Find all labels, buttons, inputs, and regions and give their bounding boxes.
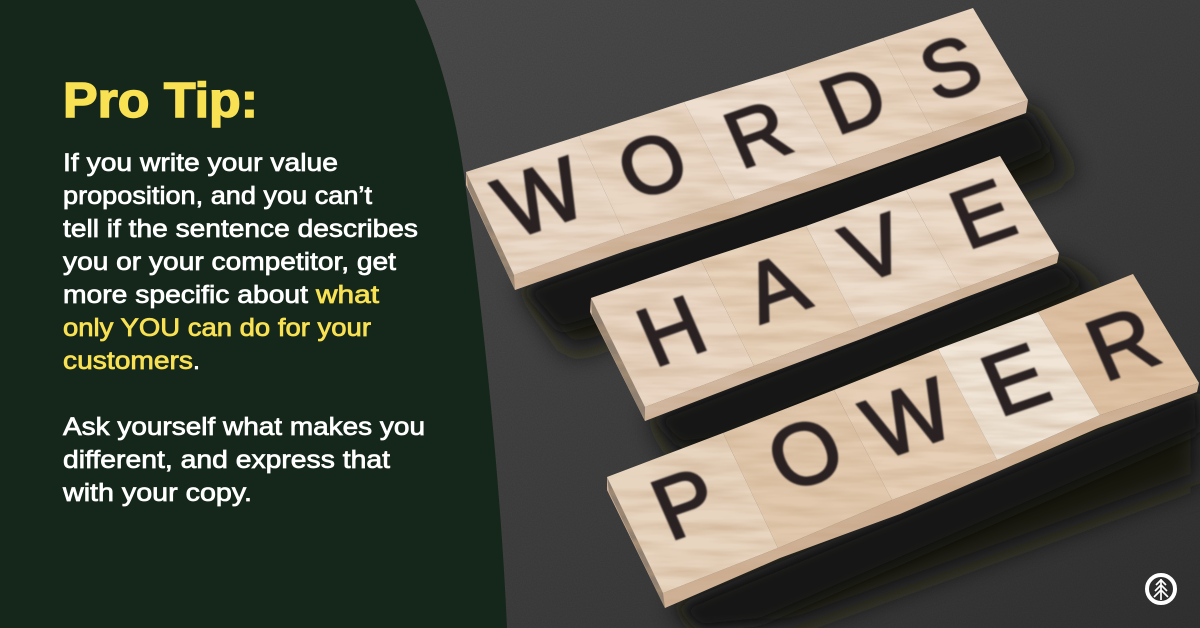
letters: HAVE — [624, 162, 1028, 384]
letters: POWER: O — [753, 397, 857, 510]
letters: WORDS: D — [808, 49, 900, 152]
text block: second paragraph: Ask yourself what makes you — [63, 413, 425, 441]
icon: tree logo badge — [1147, 575, 1175, 603]
tile sides: HAVE — [590, 253, 1059, 421]
text block: second paragraph — [62, 413, 425, 507]
letters: HAVE: H — [624, 278, 719, 384]
letters: POWER — [638, 288, 1172, 559]
text block: second paragraph: with your copy. — [62, 479, 252, 507]
tile sides: WORDS — [466, 100, 1028, 290]
letters: WORDS: R — [712, 83, 804, 186]
tile left edge: WORDS — [466, 172, 515, 290]
text block: first paragraph: only YOU can do for your — [63, 314, 371, 342]
letters: WORDS: O — [605, 113, 701, 218]
letters: HAVE: A — [730, 236, 821, 340]
tile H — [591, 260, 754, 407]
tile E — [938, 312, 1100, 460]
text block: first paragraph: proposition, and you can’t — [63, 182, 372, 210]
letters: POWER: E — [968, 325, 1063, 435]
letters: WORDS: S — [907, 18, 994, 119]
text block: first paragraph: . — [193, 347, 200, 375]
tile R — [684, 71, 837, 200]
tile shadows — [520, 105, 1200, 628]
letters: WORDS — [481, 18, 994, 257]
letters: WORDS: W — [481, 138, 600, 257]
text block: first paragraph: what — [315, 281, 379, 309]
tile W — [834, 349, 997, 500]
tile V — [806, 190, 961, 327]
tile D — [785, 38, 933, 165]
tile left edge: POWER — [607, 477, 665, 608]
letters: POWER: R — [1072, 288, 1172, 399]
tile left edge: HAVE — [591, 298, 645, 421]
text block: first paragraph: customers — [63, 347, 193, 375]
tile S — [883, 8, 1028, 132]
background photo: dark textured surface — [400, 0, 1200, 628]
text block: first paragraph: you or your competitor, get — [63, 248, 396, 276]
text block: first paragraph: tell if the sentence describes — [63, 215, 418, 243]
heading: Pro Tip: Pro Tip: — [63, 74, 258, 128]
text block: second paragraph: different, and express that — [63, 446, 390, 474]
photo: HAVE tiles — [590, 156, 1059, 421]
tile A — [701, 226, 859, 366]
tile sides: POWER — [607, 383, 1199, 608]
tile P — [607, 433, 778, 593]
tile O — [723, 390, 892, 548]
text block: first paragraph: more specific about — [63, 281, 308, 309]
letters: HAVE: E — [937, 162, 1028, 266]
tile W — [466, 136, 625, 275]
text block: first paragraph: If you write your value — [63, 149, 338, 177]
photo: POWER tiles — [607, 274, 1199, 608]
letters: POWER: W — [849, 359, 968, 478]
letters: HAVE: V — [829, 196, 920, 300]
tile O — [579, 102, 735, 235]
text block: first paragraph — [63, 149, 418, 375]
tile E — [906, 156, 1059, 289]
photo: WORDS tiles — [466, 8, 1028, 290]
panel: dark green curved text panel — [0, 0, 507, 628]
letters: POWER: P — [638, 449, 733, 559]
tile R — [1038, 274, 1199, 415]
